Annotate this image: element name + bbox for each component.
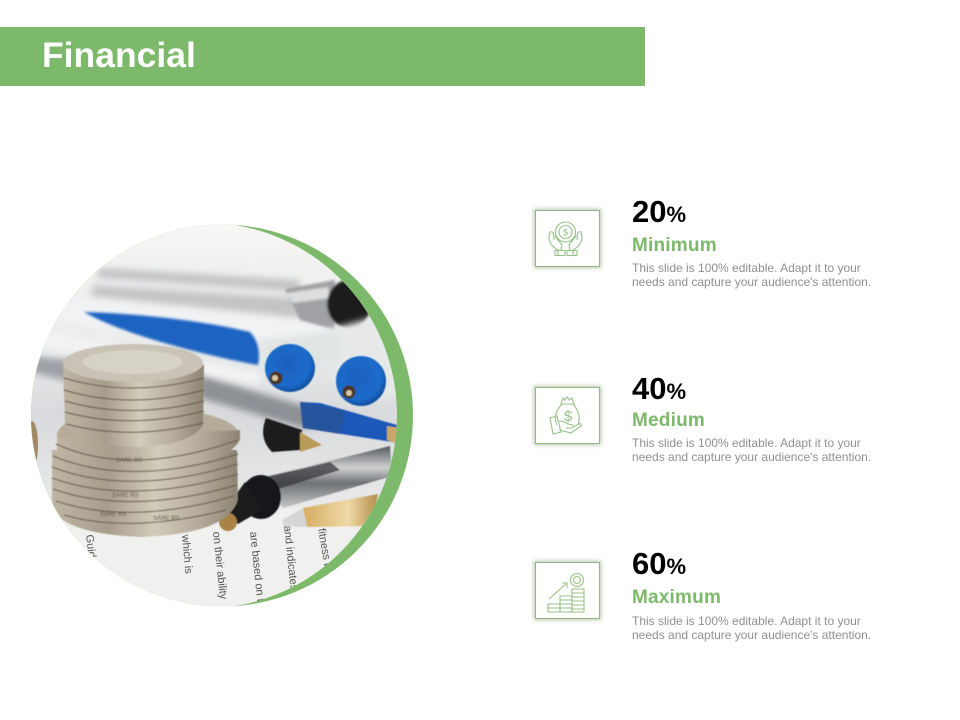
blurred blue pen body	[84, 312, 259, 365]
coin edge inscriptions: SARE RS	[153, 516, 179, 522]
middle black pen	[263, 418, 322, 452]
paper text: Guide fo	[83, 534, 100, 577]
description 2	[632, 436, 871, 464]
lower black pen	[219, 446, 392, 531]
small edge coin	[31, 421, 38, 461]
coin stack lower	[52, 408, 240, 537]
icon box: hands holding coin: $	[563, 228, 568, 238]
silver pens	[30, 268, 340, 430]
description 3: This slide is 100% editable. Adapt it to your	[632, 614, 861, 628]
paper	[60, 506, 375, 606]
icon box: hands holding coin	[535, 210, 600, 267]
gold pen	[282, 494, 378, 527]
top pen barrel	[285, 280, 371, 330]
coin stack upper	[63, 344, 204, 447]
percent: 60%: 60%	[632, 546, 686, 581]
label: Medium: Medium	[632, 410, 705, 431]
description 1: This slide is 100% editable. Adapt it to your	[632, 261, 861, 275]
paper text	[86, 526, 329, 602]
description 2: This slide is 100% editable. Adapt it to your	[632, 436, 861, 450]
paper text: fitness by S	[315, 527, 337, 586]
percent: 20%: 20%	[632, 194, 686, 229]
coin edge inscriptions	[100, 458, 179, 522]
paper text: which is	[179, 533, 194, 575]
icon box: growth chart with coin stacks	[535, 562, 600, 619]
coin edge inscriptions: SARE RS	[112, 493, 138, 499]
description 1	[632, 261, 871, 289]
label: Minimum: Minimum	[632, 235, 717, 256]
description 3: needs and capture your audience's attention.	[632, 628, 871, 642]
blue pen caps	[265, 344, 386, 406]
paper text: and indicates	[281, 525, 300, 591]
percent: 40%: 40%	[632, 371, 686, 406]
label: Maximum: Maximum	[632, 587, 721, 608]
title: Financial	[42, 35, 196, 75]
green crescent	[31, 224, 413, 606]
icon box: money bag in hand: $	[564, 408, 573, 425]
coin edge inscriptions: SARE RS	[116, 458, 142, 464]
paper text: are based on the	[247, 531, 268, 614]
description 3	[632, 614, 871, 642]
photo: coins and pens in a circle with green crescent	[31, 224, 413, 606]
paper text: on their ability	[210, 531, 229, 600]
description 2: needs and capture your audience's attention.	[632, 450, 871, 464]
title banner	[0, 27, 645, 86]
middle blue pen	[300, 402, 400, 445]
icon box: money bag in hand	[535, 387, 600, 444]
coin edge inscriptions: SARE RS	[100, 512, 126, 518]
description 1: needs and capture your audience's attention.	[632, 275, 871, 289]
